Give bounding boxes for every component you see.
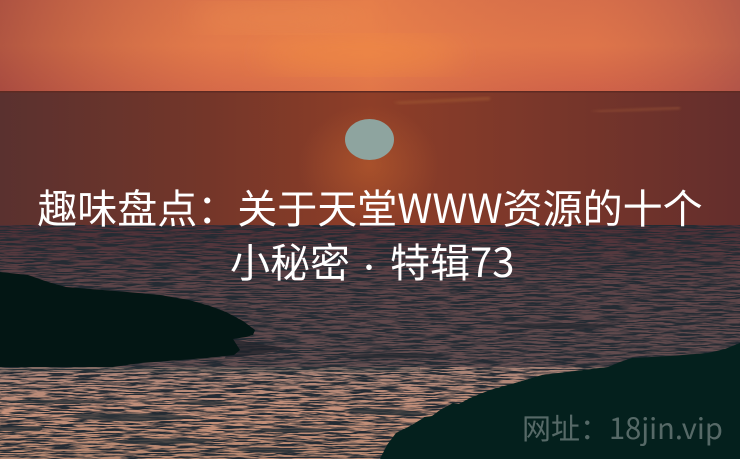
right island silhouette: [380, 343, 740, 459]
title line 2: ·: [356, 248, 382, 285]
sea: upper dark water: [0, 225, 740, 367]
background: darkened lower sky: [0, 91, 740, 226]
sea: lower bright water: [0, 367, 740, 459]
title line 2: 特辑73: [390, 231, 514, 289]
title line 1: 趣味盘点：关于天堂WWW资源的十个: [37, 177, 703, 235]
watermark: 网址：18jin.vip: [522, 406, 723, 448]
sun: [345, 119, 394, 160]
title line 2: 小秘密: [230, 231, 350, 289]
title: [37, 177, 703, 289]
background: sunset sky: [0, 0, 740, 92]
left island silhouette: [0, 272, 288, 367]
